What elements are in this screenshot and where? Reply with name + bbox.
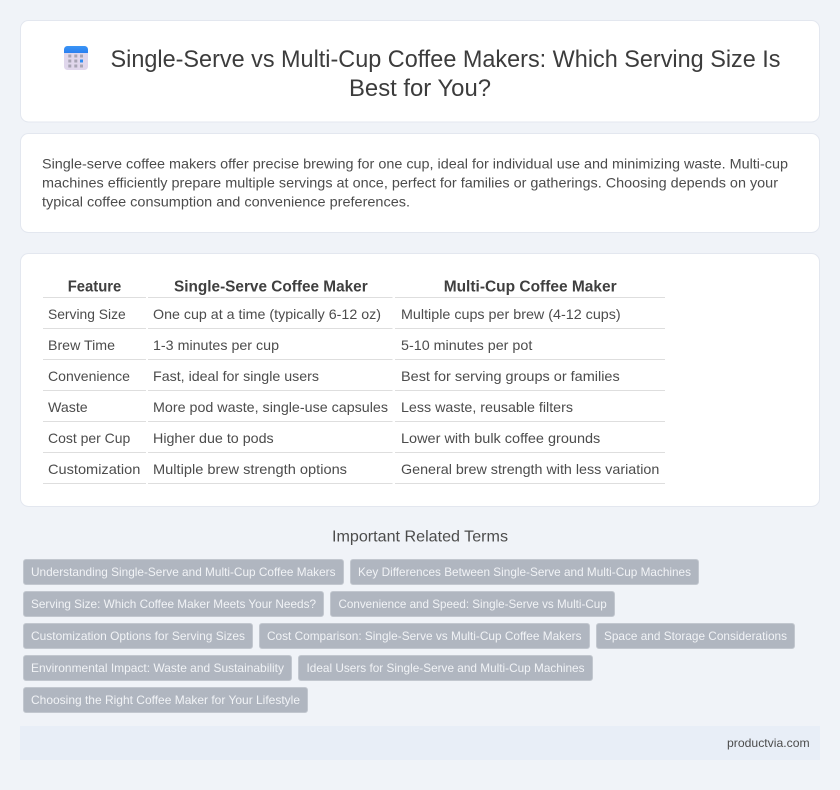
row: brew time <box>48 337 532 353</box>
panel: summary <box>20 134 820 232</box>
tag: Key Differences Between Single-Serve and Multi-Cup Machines <box>358 565 691 579</box>
row: cost per cup: Higher due to pods <box>153 430 274 446</box>
table header row <box>68 278 617 296</box>
tag <box>24 624 252 648</box>
tag: Space and Storage Considerations <box>604 629 787 643</box>
row: brew time: Brew Time <box>48 337 115 353</box>
table rules <box>43 298 665 484</box>
row: customization: Customization <box>48 461 140 477</box>
table header row: Single-Serve Coffee Maker <box>174 278 368 296</box>
row: cost per cup: Lower with bulk coffee grounds <box>401 430 600 446</box>
tag: Understanding Single-Serve and Multi-Cup Coffee Makers <box>31 565 336 579</box>
summary text: machines efficiently prepare multiple servings at once, perfect for families or gatherings. Choosing depends on your <box>42 174 778 190</box>
tag <box>298 656 592 680</box>
tag <box>24 592 324 616</box>
heading: related terms: Important Related Terms <box>332 528 508 546</box>
summary text: Single-serve coffee makers offer precise brewing for one cup, ideal for individual use and minimizing waste. Multi-cup <box>42 156 788 172</box>
row: customization: Multiple brew strength options <box>153 461 347 477</box>
row: serving size: Serving Size <box>48 306 126 322</box>
icon: calendar <box>64 46 88 70</box>
row: waste: Less waste, reusable filters <box>401 399 573 415</box>
panel: comparison table <box>20 254 820 506</box>
row: cost per cup: Cost per Cup <box>48 430 131 446</box>
tag: Convenience and Speed: Single-Serve vs Multi-Cup <box>338 597 607 611</box>
tag: Serving Size: Which Coffee Maker Meets Your Needs? <box>31 597 316 611</box>
tag: Cost Comparison: Single-Serve vs Multi-Cup Coffee Makers <box>267 629 582 643</box>
tag <box>350 560 698 584</box>
summary text <box>42 156 788 210</box>
row: serving size: Multiple cups per brew (4-12 cups) <box>401 306 621 322</box>
footer: productvia.com <box>727 736 810 750</box>
title <box>110 46 780 102</box>
table header row: Multi-Cup Coffee Maker <box>444 278 617 296</box>
row: convenience <box>48 368 620 384</box>
tag: Environmental Impact: Waste and Sustainability <box>31 661 284 675</box>
row: serving size <box>48 306 621 322</box>
row: convenience: Fast, ideal for single users <box>153 368 319 384</box>
tag: Customization Options for Serving Sizes <box>31 629 245 643</box>
tag <box>24 656 292 680</box>
table header row: Feature <box>68 278 121 296</box>
tag: Choosing the Right Coffee Maker for Your Lifestyle <box>31 693 300 707</box>
summary text: typical coffee consumption and convenience preferences. <box>42 194 410 210</box>
title: Single-Serve vs Multi-Cup Coffee Makers: Which Serving Size Is <box>110 46 780 73</box>
row: brew time: 5-10 minutes per pot <box>401 337 532 353</box>
row: convenience: Best for serving groups or families <box>401 368 620 384</box>
row: cost per cup <box>48 430 600 446</box>
title: Best for You? <box>349 75 491 102</box>
row: convenience: Convenience <box>48 368 130 384</box>
tag <box>596 624 794 648</box>
related term tags <box>24 560 794 712</box>
row: waste <box>48 399 573 415</box>
tag: Ideal Users for Single-Serve and Multi-Cup Machines <box>306 661 584 675</box>
row: brew time: 1-3 minutes per cup <box>153 337 279 353</box>
tag <box>330 592 614 616</box>
panel: header <box>20 20 820 122</box>
tag <box>24 560 344 584</box>
tag <box>24 688 308 712</box>
tag <box>260 624 590 648</box>
row: customization <box>48 461 659 477</box>
row: waste: More pod waste, single-use capsules <box>153 399 388 415</box>
row: customization: General brew strength with less variation <box>401 461 659 477</box>
row: serving size: One cup at a time (typically 6-12 oz) <box>153 306 381 322</box>
footer <box>20 726 820 760</box>
row: waste: Waste <box>48 399 88 415</box>
